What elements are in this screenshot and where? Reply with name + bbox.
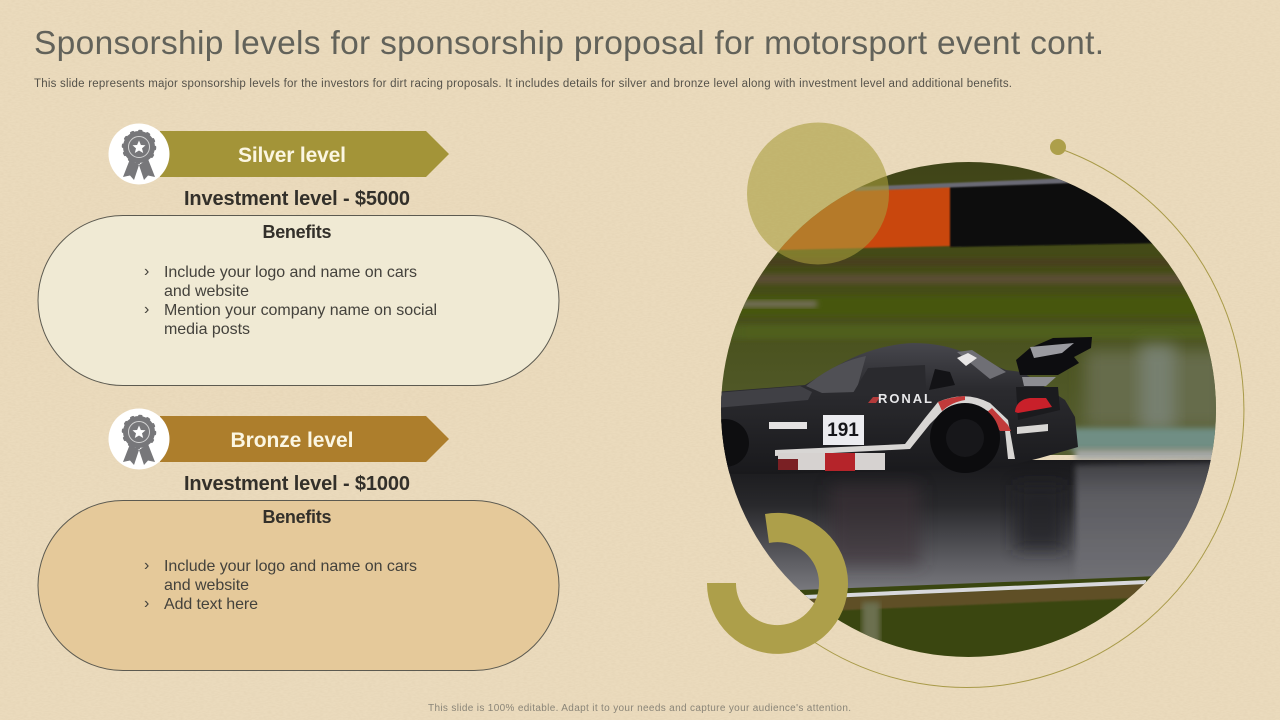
silver investment level: Investment level - $5000 [184,188,410,210]
silver benefits list: Include your logo and name on cars [164,264,417,281]
ring segment [707,513,848,654]
race number plate [823,415,864,445]
panel: bronze level [38,408,559,670]
silver benefits list: and website [164,283,249,300]
bronze benefits heading: Benefits [262,507,332,527]
car sponsor label: RONAL [878,391,932,406]
silver benefits heading: Benefits [262,222,332,242]
bronze benefits list: Include your logo and name on cars [164,558,417,575]
bronze benefits pill [38,500,559,670]
race number plate: 191 [827,420,859,441]
bronze banner label: Bronze level [230,429,354,452]
front wheel [721,419,749,467]
title: Sponsorship levels for sponsorship proposal for motorsport event cont. [34,25,1104,62]
icon: silver medal [108,124,170,184]
photo: race car on wet track [721,162,1216,657]
bronze benefits list [144,557,417,613]
car [701,337,1092,474]
bronze banner [160,416,449,462]
silver benefits list [144,263,437,338]
subtitle description: This slide represents major sponsorship levels for the investors for dirt racing proposals. It includes details for silver and bronze level along with investment level and additional benefits. [34,78,1012,90]
track background [721,162,1216,657]
silver benefits list: Mention your company name on social [164,302,437,319]
thin arc with dot [815,139,1244,687]
icon: bronze medal [108,408,170,470]
footer note: This slide is 100% editable. Adapt it to your needs and capture your audience's attention. [428,703,851,714]
silver benefits list: media posts [164,321,250,338]
silver banner [160,131,449,177]
bronze benefits list: › [144,595,149,612]
silver benefits pill [38,216,559,386]
silver benefits list: › [144,301,149,318]
rear wheel [930,403,1000,473]
bronze benefits list: › [144,557,149,574]
bronze investment level: Investment level - $1000 [184,473,410,495]
translucent circle [747,122,889,264]
silver banner label: Silver level [238,144,346,167]
bronze benefits list: and website [164,577,249,594]
silver benefits list: › [144,263,149,280]
panel: silver level [38,124,559,386]
bronze benefits list: Add text here [164,596,258,613]
